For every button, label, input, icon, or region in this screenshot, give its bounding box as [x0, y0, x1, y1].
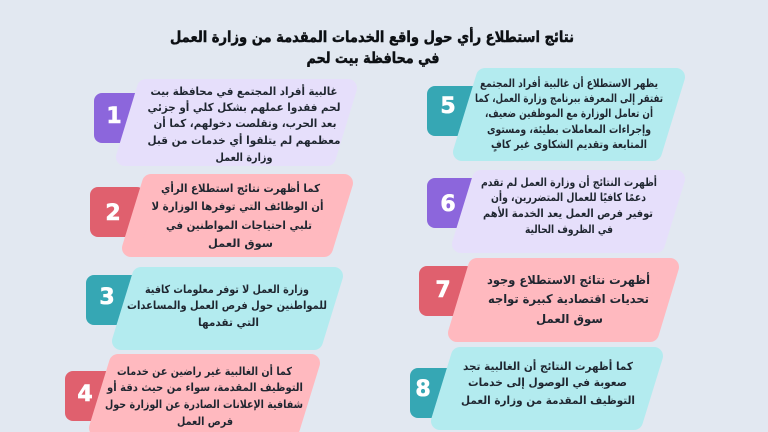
number 6: 6 [440, 192, 456, 217]
text block 8: التوظيف المقدمة من وزارة العمل [461, 394, 635, 407]
number tab 7 [419, 266, 474, 316]
text block 8 [461, 359, 635, 407]
text block 4: التوظيف المقدمة، سواء من حيث دقة أو [106, 380, 303, 394]
text block 5: أن تعامل الوزارة مع الموظفين ضعيف، [485, 106, 653, 120]
panel: finding 5 [427, 76, 676, 152]
text block 6: في الظروف الحالية [525, 223, 613, 236]
text block 2 [152, 181, 324, 250]
title: نتائج استطلاع رأي حول واقع الخدمات المقدمة من وزارة العمل [170, 27, 574, 47]
number 2: 2 [105, 201, 121, 226]
text block 7 [487, 272, 650, 327]
number tab 1 [94, 93, 149, 143]
number tab 4 [65, 371, 120, 421]
card body 7 [457, 267, 670, 333]
text block 5: وإجراءات المعاملات بطيئة، ومستوى [487, 123, 651, 136]
panel: finding 7 [419, 266, 670, 333]
number 1: 1 [106, 104, 122, 129]
text block 3: وزارة العمل لا توفر معلومات كافية [145, 283, 309, 296]
card body 1 [125, 88, 348, 157]
panel: finding 3 [86, 275, 334, 341]
text block 4: كما أن الغالبية غير راضين عن خدمات [117, 364, 293, 378]
text block 7: سوق العمل [536, 312, 603, 327]
number tab 2 [90, 187, 145, 237]
panel: finding 2 [90, 181, 344, 250]
number 3: 3 [99, 285, 115, 310]
number 7: 7 [435, 278, 451, 303]
text block 5: المتابعة وتقديم الشكاوى غير كافٍ [491, 138, 647, 152]
title [170, 27, 574, 67]
text block 1 [148, 84, 340, 164]
card body 6 [461, 179, 676, 244]
number tab 8 [410, 368, 465, 418]
text block 4 [105, 364, 303, 428]
number 5: 5 [440, 94, 456, 119]
text block 1: لحم فقدوا عملهم بشكل كلي أو جزئي [148, 100, 340, 114]
card body 5 [462, 77, 676, 152]
text block 1: معظمهم لم يتلقوا أي خدمات من قبل [148, 133, 340, 147]
text block 1: بعد الحرب، وتقلصت دخولهم، كما أن [154, 116, 336, 130]
panel: finding 1 [94, 84, 348, 164]
text block 2: سوق العمل [208, 237, 273, 250]
text block 5: تفتقر إلى المعرفة ببرنامج وزارة العمل، كما [475, 92, 663, 105]
text block 1: وزارة العمل [216, 151, 273, 164]
card body 2 [131, 183, 344, 248]
number tab 5 [427, 86, 482, 136]
text block 4: شفافية الإعلانات الصادرة عن الوزارة حول [105, 398, 303, 411]
text block 4: فرص العمل [177, 415, 233, 428]
text block 3: التي تقدمها [198, 316, 259, 329]
text block 2: أن الوظائف التي توفرها الوزارة لا [152, 199, 324, 213]
card body 3 [121, 276, 334, 341]
number 4: 4 [77, 382, 93, 407]
text block 8: كما أظهرت النتائج أن الغالبية تجد [463, 359, 634, 373]
text block 8: صعوبة في الوصول إلى خدمات [468, 376, 627, 389]
panel: finding 4 [65, 363, 311, 428]
text block 2: كما أظهرت نتائج استطلاع الرأي [161, 181, 321, 195]
text block 2: تلبي احتياجات المواطنين في [166, 219, 312, 232]
card body 4 [98, 363, 311, 428]
card body 8 [440, 356, 654, 421]
number tab 3 [86, 275, 141, 325]
text block 3: للمواطنين حول فرص العمل والمساعدات [127, 299, 327, 312]
panel: finding 8 [410, 356, 654, 421]
panel: finding 6 [427, 175, 676, 244]
text block 6: دعمًا كافيًا للعمال المتضررين، وأن [491, 190, 646, 204]
text block 7: أظهرت نتائج الاستطلاع وجود [487, 272, 650, 288]
text block 7: تحديات اقتصادية كبيرة تواجه [488, 292, 649, 307]
text block 6: توفير فرص العمل يعد الخدمة الأهم [483, 206, 653, 220]
text block 1: غالبية أفراد المجتمع في محافظة بيت [150, 84, 338, 98]
text block 6 [481, 175, 657, 236]
text block 5 [475, 76, 663, 152]
number tab 6 [427, 178, 482, 228]
title: في محافظة بيت لحم [306, 49, 440, 67]
text block 3 [127, 283, 327, 329]
number 8: 8 [415, 377, 431, 402]
text block 5: يظهر الاستطلاع أن غالبية أفراد المجتمع [480, 76, 658, 90]
text block 6: أظهرت النتائج أن وزارة العمل لم تقدم [481, 175, 657, 189]
